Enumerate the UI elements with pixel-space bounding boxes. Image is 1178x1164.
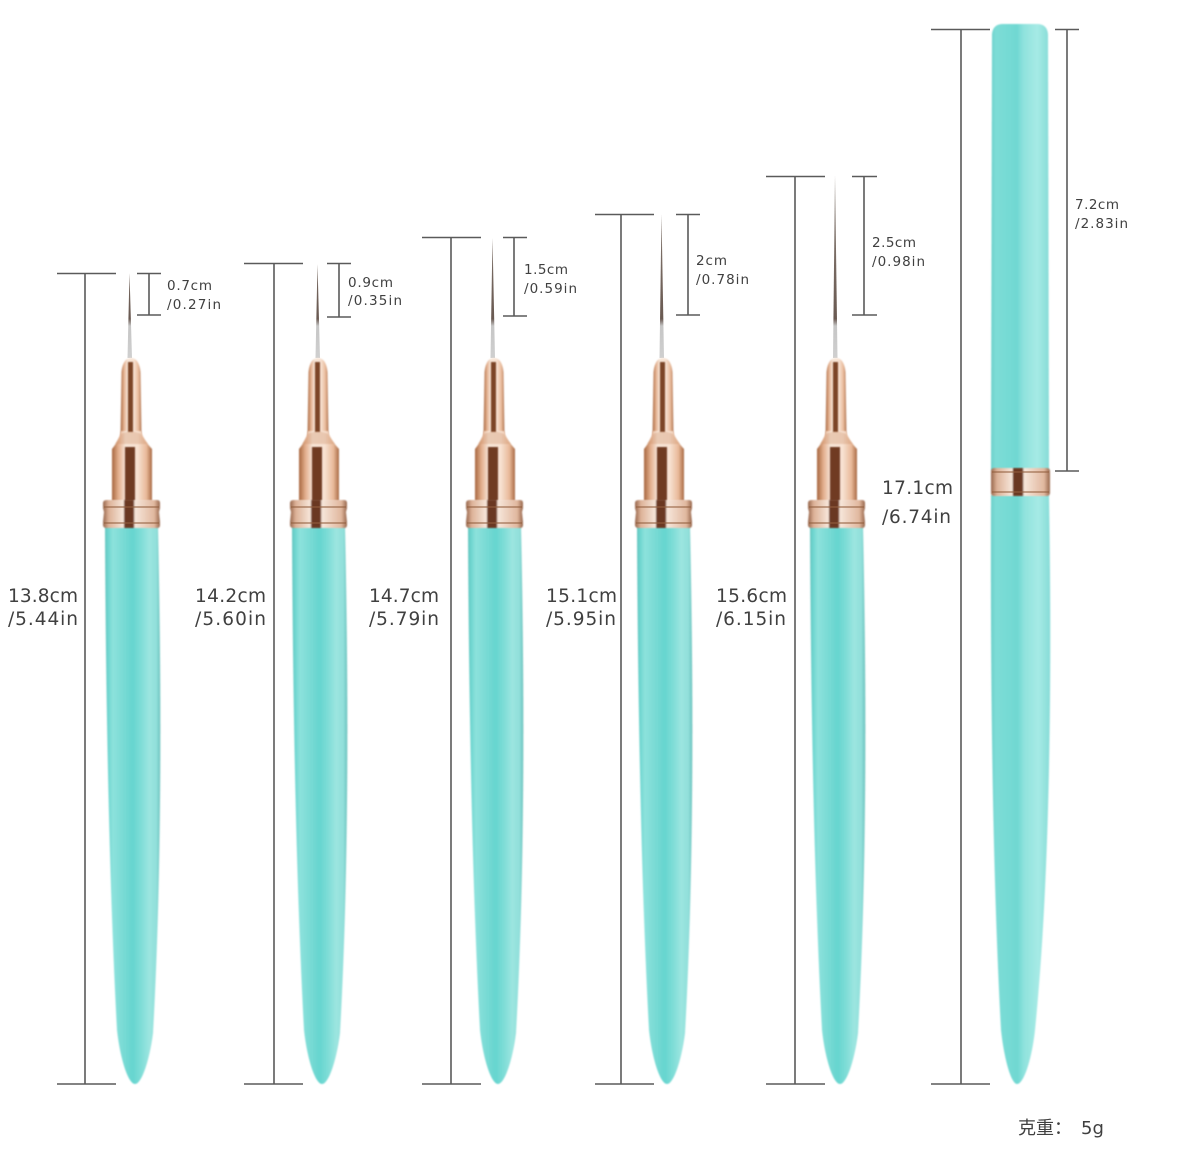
bristle length label: /0.59in [524,281,577,297]
brush figure 5: 15.6cm [716,175,925,1084]
total length label: 15.6cm [716,586,787,607]
total length label: /5.95in [546,609,616,630]
lower handle [991,495,1050,1084]
total length label: /6.74in [882,507,951,528]
brush figure 3: 14.7cm [369,238,577,1084]
handle-cap length dimension line [1055,30,1079,471]
bristle length dimension line [327,264,351,317]
bristle length label: /0.35in [348,293,402,309]
bristle length label: /0.98in [872,254,925,270]
brush body [103,358,160,1084]
total length dimension line [57,274,116,1084]
brush hair [316,264,320,358]
total length label: 15.1cm [546,586,617,607]
total length label: 14.7cm [369,586,439,607]
weight note: 5g [1081,1118,1104,1139]
total length label: /5.79in [369,609,439,630]
cap length label: /2.83in [1075,216,1128,232]
bristle length label: /0.78in [696,272,749,288]
brush figure 4: 15.1cm [546,214,749,1084]
total length label: /5.60in [195,609,266,630]
brush body [466,358,523,1084]
total length dimension line [931,30,990,1084]
upper cap [991,24,1049,470]
total length label: /6.15in [716,609,786,630]
bristle length label: 0.9cm [348,275,393,291]
total length dimension line [244,264,303,1084]
total length dimension line [766,176,825,1084]
brush hair [490,238,495,358]
bristle length label: 0.7cm [167,278,212,294]
brush hair [128,273,132,358]
metal ring [991,468,1050,496]
total length dimension line [422,238,481,1084]
brush body [635,358,692,1084]
weight note: 克重： [1018,1118,1072,1139]
brush figure 6: 17.1cm [882,24,1128,1084]
bristle length dimension line [137,274,161,315]
total length dimension line [595,214,654,1084]
brush figure 1: 13.8cm [8,273,221,1084]
brush figure 2: 14.2cm [195,264,402,1084]
bristle length dimension line [852,176,877,315]
bristle length dimension line [676,214,700,315]
total length label: 13.8cm [8,586,78,607]
bristle length dimension line [503,238,527,316]
bristle length label: 2cm [696,253,727,269]
bristle length label: 2.5cm [872,235,916,251]
brush body [808,358,865,1084]
brush hair [660,214,664,358]
total length label: 17.1cm [882,478,953,499]
brush body [290,358,347,1084]
cap length label: 7.2cm [1075,197,1119,213]
bristle length label: /0.27in [167,297,221,313]
total length label: /5.44in [8,609,78,630]
bristle length label: 1.5cm [524,262,568,278]
brush hair [833,175,838,358]
total length label: 14.2cm [195,586,266,607]
